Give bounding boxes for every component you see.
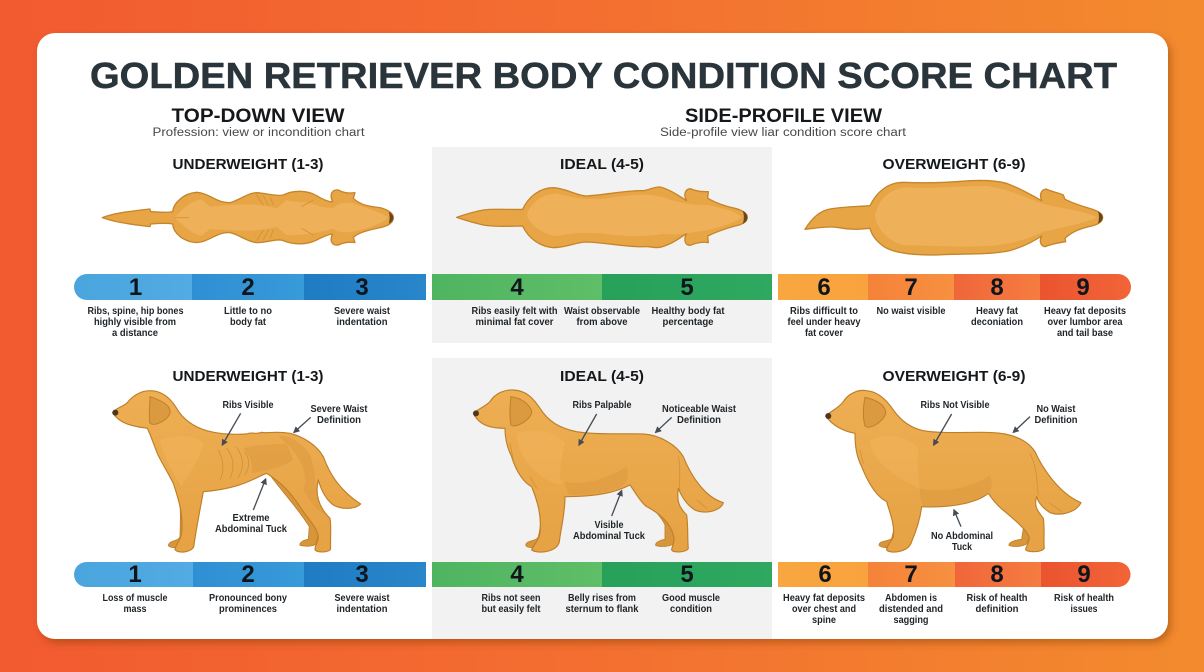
heading: overweight side: OVERWEIGHT (6-9) <box>882 368 1026 385</box>
descriptions: top-down scores: Healthy body fat <box>652 306 725 317</box>
descriptions: top-down scores: over lumbor area <box>1048 317 1123 328</box>
heading: side-profile view <box>660 106 907 139</box>
score bar: side-profile overweight 6-9: 7 <box>904 561 918 588</box>
icon: overweight dog side view <box>825 390 1081 552</box>
score bar: side-profile underweight 1-3: 1 <box>128 561 142 588</box>
score bar: top-down ideal 4-5: 4 <box>510 274 524 301</box>
title: GOLDEN RETRIEVER BODY CONDITION SCORE CHART <box>90 55 1117 96</box>
panel: top-down underweight <box>102 156 393 245</box>
descriptions: side-profile scores: Risk of health <box>1054 593 1114 604</box>
heading: overweight top: OVERWEIGHT (6-9) <box>882 156 1026 173</box>
score bar: top-down underweight 1-3: 2 <box>241 274 255 301</box>
descriptions: top-down scores: Little to no <box>224 306 272 317</box>
score bar: side-profile overweight 6-9: 6 <box>818 561 832 588</box>
descriptions: side-profile scores: Heavy fat deposits <box>783 593 865 604</box>
callout: visible abdominal tuck: Visible <box>594 520 624 531</box>
score bar: side-profile overweight 6-9: 9 <box>1077 561 1091 588</box>
heading: underweight top: UNDERWEIGHT (1-3) <box>172 156 324 173</box>
score bar: side-profile ideal 4-5: 5 <box>680 561 694 588</box>
descriptions: top-down scores: Ribs difficult to <box>790 306 858 317</box>
callout: ribs not visible: Ribs Not Visible <box>920 400 990 411</box>
icon: overweight dog from above <box>805 180 1103 255</box>
score bar: side-profile underweight 1-3: 3 <box>355 561 369 588</box>
descriptions: side-profile scores: prominences <box>219 604 277 615</box>
score bar: top-down overweight 6-9: 8 <box>990 274 1004 301</box>
heading: ideal top: IDEAL (4-5) <box>560 156 644 173</box>
callout: extreme abdominal tuck <box>215 479 287 535</box>
callout: noticeable waist definition: Noticeable Waist <box>662 404 737 415</box>
score bar: top-down overweight 6-9: 7 <box>904 274 918 301</box>
score bar: top-down ideal 4-5: 5 <box>680 274 694 301</box>
score bar: side-profile underweight 1-3 <box>74 561 426 588</box>
score bar: side-profile overweight 6-9 <box>778 561 1130 588</box>
descriptions: top-down scores: body fat <box>230 317 267 328</box>
descriptions: side-profile scores: sternum to flank <box>566 604 639 615</box>
callout: visible abdominal tuck <box>573 491 645 542</box>
panel: top-down overweight <box>805 156 1103 255</box>
callout: noticeable waist definition: Definition <box>677 415 721 426</box>
score bar: top-down overweight 6-9 <box>778 274 1131 301</box>
panel: side-profile overweight <box>825 368 1081 553</box>
heading: ideal side: IDEAL (4-5) <box>560 368 644 385</box>
icon: underweight dog from above <box>102 190 393 245</box>
descriptions: top-down scores: minimal fat cover <box>476 317 554 328</box>
descriptions: top-down scores: Ribs easily felt with <box>472 306 558 317</box>
callout: noticeable waist definition <box>656 404 737 432</box>
descriptions: side-profile scores: Belly rises from <box>568 593 636 604</box>
descriptions: side-profile scores: but easily felt <box>482 604 541 615</box>
score bar: top-down ideal 4-5 <box>432 274 772 301</box>
callout: extreme abdominal tuck: Extreme <box>232 513 270 524</box>
descriptions: side-profile scores: mass <box>124 604 147 615</box>
descriptions: top-down scores: Ribs, spine, hip bones <box>88 306 184 317</box>
descriptions: side-profile scores: distended and <box>879 604 943 615</box>
callout: extreme abdominal tuck: Abdominal Tuck <box>215 524 287 535</box>
score bar: side-profile ideal 4-5: 4 <box>510 561 524 588</box>
heading: top-down view: TOP-DOWN VIEW <box>172 106 345 127</box>
callout: no waist definition: No Waist <box>1036 404 1076 415</box>
icon: ideal dog side view <box>473 390 723 552</box>
descriptions: side-profile scores: sagging <box>894 615 928 626</box>
panel: top-down ideal background <box>432 147 772 343</box>
heading: top-down view <box>152 106 365 139</box>
score bar: top-down underweight 1-3: 3 <box>355 274 369 301</box>
descriptions: top-down scores: feel under heavy <box>788 317 861 328</box>
callout: no waist definition <box>1013 404 1078 432</box>
score bar: top-down underweight 1-3 <box>74 274 426 301</box>
callout: no waist definition: Definition <box>1034 415 1078 426</box>
score bar: side-profile ideal 4-5 <box>432 561 772 588</box>
score bar: top-down overweight 6-9: 9 <box>1076 274 1090 301</box>
descriptions: top-down scores: a distance <box>112 328 158 339</box>
score bar: side-profile overweight 6-9: 8 <box>990 561 1004 588</box>
callout: no abdominal tuck: Tuck <box>952 542 972 553</box>
callout: ribs visible: Ribs Visible <box>222 400 274 411</box>
icon: underweight dog side view <box>112 391 361 552</box>
descriptions: top-down scores: fat cover <box>805 328 843 339</box>
callout: no abdominal tuck <box>931 510 993 553</box>
panel: top-down ideal <box>457 156 747 248</box>
descriptions: side-profile scores: Loss of muscle <box>102 593 168 604</box>
descriptions: side-profile scores <box>102 593 1114 626</box>
panel: side-profile ideal <box>473 368 737 552</box>
score bar: top-down underweight 1-3: 1 <box>129 274 142 301</box>
panel: side-profile ideal background <box>432 358 772 639</box>
descriptions: side-profile scores: spine <box>812 615 836 626</box>
callout: severe waist definition: Severe Waist <box>310 404 368 415</box>
descriptions: top-down scores: Waist observable <box>564 306 640 317</box>
descriptions: side-profile scores: Risk of health <box>966 593 1028 604</box>
descriptions: top-down scores: indentation <box>336 317 388 328</box>
descriptions: top-down scores: from above <box>576 317 628 328</box>
descriptions: top-down scores: Severe waist <box>334 306 391 317</box>
descriptions: side-profile scores: over chest and <box>792 604 856 615</box>
descriptions: side-profile scores: indentation <box>336 604 388 615</box>
heading: side-profile view: SIDE-PROFILE VIEW <box>685 106 882 127</box>
heading: top-down view: Profession: view or incondition chart <box>152 127 365 139</box>
score bar: top-down overweight 6-9: 6 <box>817 274 831 301</box>
callout: ribs not visible <box>920 400 990 445</box>
callout: ribs visible <box>222 400 274 445</box>
callout: visible abdominal tuck: Abdominal Tuck <box>573 531 645 542</box>
callout: ribs palpable <box>572 400 632 445</box>
descriptions: side-profile scores: condition <box>670 604 712 615</box>
callout: severe waist definition: Definition <box>317 415 361 426</box>
descriptions: top-down scores: and tail base <box>1057 328 1113 339</box>
descriptions: side-profile scores: Severe waist <box>334 593 390 604</box>
callout: severe waist definition <box>294 404 368 432</box>
callout: no abdominal tuck: No Abdominal <box>931 531 993 542</box>
panel: side-profile underweight <box>112 368 368 552</box>
descriptions: side-profile scores: issues <box>1070 604 1098 615</box>
descriptions: side-profile scores: Ribs not seen <box>482 593 540 604</box>
descriptions: top-down scores: No waist visible <box>876 306 946 317</box>
descriptions: top-down scores: Heavy fat deposits <box>1044 306 1126 317</box>
descriptions: top-down scores: highly visible from <box>94 317 176 328</box>
score bar: side-profile underweight 1-3: 2 <box>241 561 255 588</box>
descriptions: side-profile scores: Good muscle <box>662 593 720 604</box>
descriptions: top-down scores: Heavy fat <box>976 306 1019 317</box>
heading: side-profile view: Side-profile view liar condition score chart <box>660 127 907 139</box>
descriptions: side-profile scores: definition <box>976 604 1018 615</box>
heading: underweight side: UNDERWEIGHT (1-3) <box>172 368 324 385</box>
descriptions: side-profile scores: Abdomen is <box>885 593 937 604</box>
callout: ribs palpable: Ribs Palpable <box>572 400 632 411</box>
descriptions: top-down scores: percentage <box>662 317 714 328</box>
icon: ideal dog from above <box>457 187 747 248</box>
descriptions: top-down scores <box>88 306 1126 339</box>
descriptions: side-profile scores: Pronounced bony <box>209 593 287 604</box>
descriptions: top-down scores: deconiation <box>971 317 1023 328</box>
